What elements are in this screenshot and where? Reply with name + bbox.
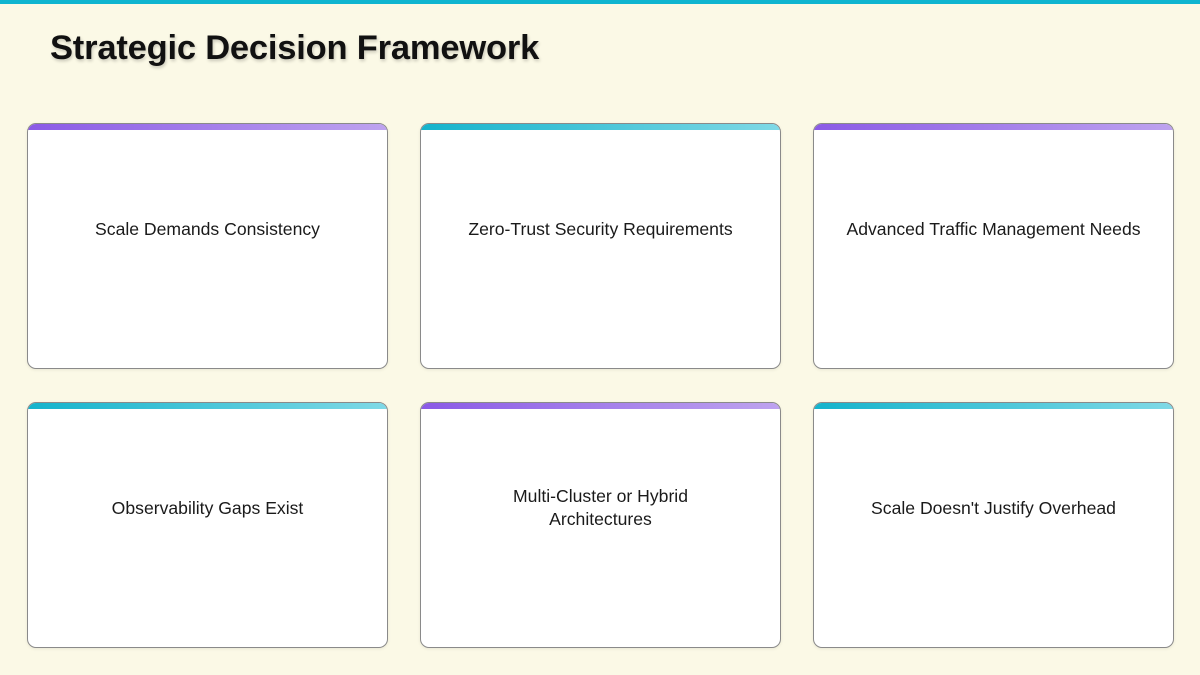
card: scale doesn't justify overhead: Scale Doesn't Justify Overhead xyxy=(871,498,1116,518)
title: Strategic Decision Framework xyxy=(50,29,539,67)
card: advanced traffic management: Advanced Traffic Management Needs xyxy=(846,218,1141,238)
card: observability gaps: Observability Gaps Exist xyxy=(112,498,303,518)
card: scale demands consistency xyxy=(27,123,388,369)
card: multi-cluster xyxy=(420,402,781,648)
card: advanced traffic management xyxy=(813,123,1174,369)
card: multi-cluster: Multi-Cluster or Hybrid Architectures xyxy=(513,486,688,529)
card: scale doesn't justify overhead xyxy=(813,402,1174,648)
card: zero-trust security xyxy=(420,123,781,369)
card: scale demands consistency: Scale Demands Consistency xyxy=(95,218,320,238)
card: observability gaps xyxy=(27,402,388,648)
card: zero-trust security: Zero-Trust Security Requirements xyxy=(468,218,733,238)
